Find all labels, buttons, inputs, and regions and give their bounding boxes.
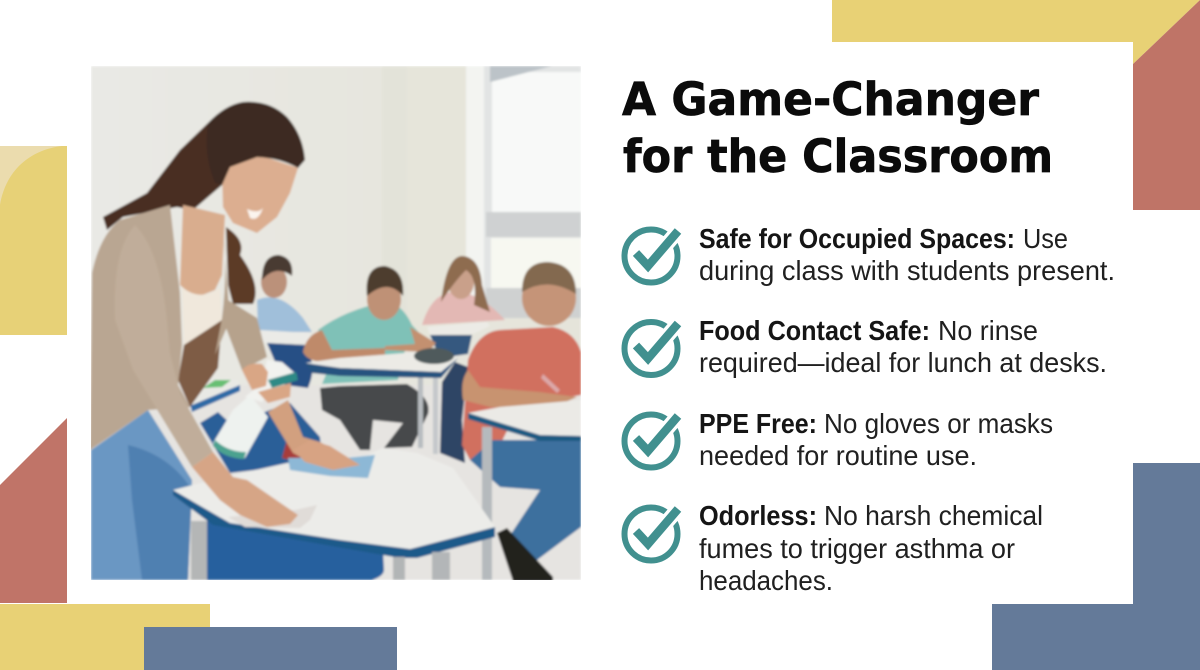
blue chair behind desk [200,403,384,580]
item text: fumes to trigger asthma or [699,533,1015,564]
icon: teal check in circle [624,230,678,282]
item text: No harsh chemical [824,500,1043,531]
photo: teacher wiping a desk in a classroom with students [90,66,581,581]
item text: during class with students present. [699,255,1115,286]
teacher's face [222,155,298,233]
right panel text and checklist [622,73,1115,596]
classroom back wall [91,66,581,387]
decorative shape: bottom blue band [144,627,397,670]
teacher's cardigan [90,205,190,450]
checklist item: Safe for Occupied Spaces [624,223,1115,286]
cardigan right panel and sleeve [215,232,267,370]
item text [699,315,1107,378]
title: A Game-Changer [622,73,1040,126]
desk top [173,448,495,558]
teacher's other hand [299,444,360,472]
decorative shape: left yellow block [0,146,67,335]
decorative shape: top yellow band [832,0,1200,64]
checklist item: Food Contact Safe [624,315,1107,378]
icon: teal check in circle [624,322,678,375]
icon: teal check in circle [624,414,678,468]
item text: required—ideal for lunch at desks. [699,347,1107,378]
small desk behind teacher [190,377,240,412]
teacher's smile [247,208,263,219]
student backpack and chair [440,362,468,463]
student in red shirt, front [462,262,581,581]
item text: No gloves or masks [824,408,1053,439]
student in teal shirt [303,266,458,454]
decorative shape: bottom right blue block [992,463,1200,670]
item text: Odorless: [699,500,817,531]
wall column [466,66,484,296]
item text [699,408,1053,471]
teacher's front forearm and hand [192,452,298,527]
floor [91,385,581,580]
checklist item: Odorless [624,500,1043,596]
title [622,73,1053,183]
item text [699,223,1115,286]
teacher's front sleeve [156,406,214,468]
white cloth under hand [228,505,317,528]
item text: Food Contact Safe: [699,315,930,346]
window [484,66,581,318]
item text: Safe for Occupied Spaces: [699,223,1015,254]
item text: headaches. [699,565,833,596]
teacher's loose hair over shoulder [226,227,256,304]
decorative shape: left red block [0,418,67,603]
decorative shape: bottom yellow band [0,604,210,670]
checklist item: PPE Free [624,408,1053,471]
student in pink shirt, back row [422,256,505,358]
blue cloth under hand [288,455,375,478]
teacher's neck and white top [178,205,225,407]
decorative shape: top right red block [1133,0,1200,210]
item text [699,500,1043,596]
teacher's hand holding bottle and forearm [241,362,323,456]
teacher's back hair [103,123,222,230]
teacher's hair on top [207,102,305,185]
icon: teal check in circle [624,508,678,560]
item text: needed for routine use. [699,440,977,471]
desk legs [191,521,450,580]
spray bottle [213,360,298,459]
title: for the Classroom [623,130,1053,183]
student in blue shirt, back row [257,255,312,388]
item text: No rinse [938,315,1038,346]
teacher's jeans [91,410,192,580]
item text: PPE Free: [699,408,817,439]
item text: Use [1023,223,1068,254]
